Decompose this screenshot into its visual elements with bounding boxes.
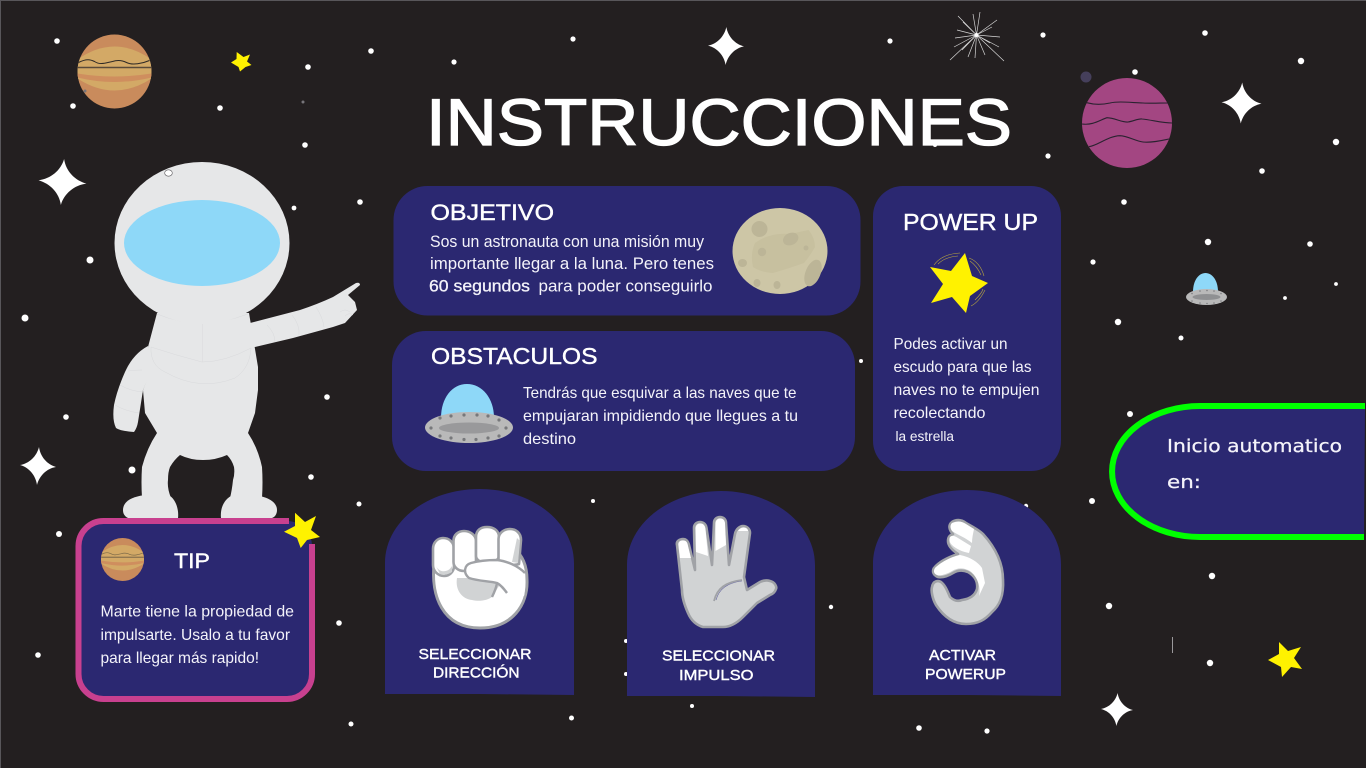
text: obstaculos: Tendrás que esquivar a las naves que te [523,385,797,402]
sparkle star [1221,82,1262,124]
helmet [114,162,290,324]
panel: objetivo [394,186,860,316]
text: power up: naves no te empujen [894,382,1040,399]
text: tip: para llegar más rapido! [100,650,259,667]
sparkle star [708,27,744,65]
small vertical line [1172,637,1173,653]
yellow star bottom right [1268,642,1302,677]
card: seleccionar impulso [627,491,815,697]
card: seleccionar direccion [385,489,574,695]
sparkle star [1100,692,1134,727]
icon: tip star [284,513,320,548]
label: seleccionar direccion: SELECCIONAR [418,646,532,663]
heading: obstaculos: OBSTACULOS [431,343,598,369]
torso and legs [142,313,262,498]
boots [123,495,178,518]
small ufo [1186,273,1227,305]
title: INSTRUCCIONES [426,85,1012,159]
heading: power up: POWER UP [903,209,1038,235]
label: activar powerup: ACTIVAR [929,647,996,664]
sparkle star [37,157,88,207]
text: inicio automatico [1167,436,1342,493]
text: obstaculos: empujaran impidiendo que llegues a tu [523,408,798,425]
label: seleccionar impulso: SELECCIONAR [662,648,775,664]
icon: ufo [425,384,513,443]
icon: moon [732,208,828,294]
label: activar powerup [925,647,1006,683]
yellow star small [231,52,252,72]
label: seleccionar impulso: IMPULSO [679,667,754,684]
text: inicio automatico: en: [1167,472,1201,493]
visor [124,200,280,286]
text: power up: escudo para que las [894,359,1032,376]
panel: power up [873,186,1061,471]
text: obstaculos: destino [523,431,576,448]
icon: power star [930,253,988,313]
icon: fist [433,527,527,628]
icon: ok hand [932,520,1003,624]
text: power up: la estrella [896,429,954,444]
tip border [78,521,312,699]
text: tip: Marte tiene la propiedad de [100,604,294,620]
label: seleccionar direccion [418,646,532,682]
text: objetivo [429,232,714,296]
panel: inicio automatico [1112,406,1365,537]
icon: tip planet [101,538,144,581]
left arm [113,346,153,432]
heading: objetivo: OBJETIVO [430,200,554,225]
text: power up: recolectando [894,405,986,422]
astronaut [113,162,360,518]
text: tip [100,604,294,667]
card: activar powerup [873,490,1061,696]
planet: orange [78,34,152,108]
text: inicio automatico: Inicio automatico [1167,436,1342,457]
panel: obstaculos [392,331,855,471]
label: seleccionar impulso [662,648,775,684]
text: tip: impulsarte. Usalo a tu favor [100,627,291,644]
text: objetivo: para poder conseguirlo [538,276,712,296]
suit seams [115,307,353,413]
panel: tip [78,513,320,699]
pointing arm [238,283,360,348]
starburst [950,12,1004,61]
text: power up: Podes activar un [894,336,1008,353]
icon: open hand [677,517,776,627]
text: obstaculos [523,385,798,448]
text: objetivo: 60 segundos [429,276,530,296]
text: power up [894,336,1040,444]
sparkle star [19,446,57,486]
label: seleccionar direccion: DIRECCIÓN [433,664,520,682]
label: activar powerup: POWERUP [925,666,1006,683]
text: objetivo: Sos un astronauta con una misión muy [430,232,704,251]
helmet ring [165,170,172,176]
heading: tip: TIP [174,549,210,573]
text: objetivo: importante llegar a la luna. Pero tenes [430,254,714,273]
planet: purple [1080,72,1172,168]
